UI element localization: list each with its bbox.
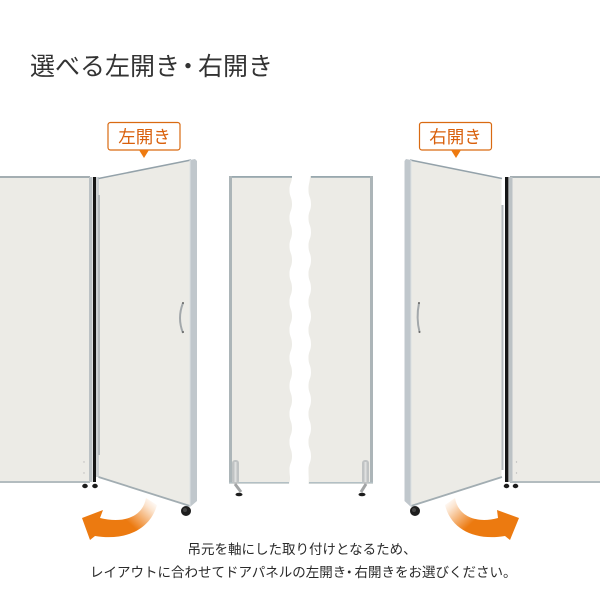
label: left-hinged (108, 122, 180, 158)
title: 選べる左開き (30, 53, 180, 81)
label: left-hinged: 左開き (118, 127, 171, 147)
left-hinged door (98, 159, 197, 516)
caption: 吊元を軸にした取り付けとなるため、 (188, 542, 417, 557)
center sample: left-side edge (229, 176, 292, 496)
caption: 右開きをお選びください。 (354, 565, 516, 580)
center sample: right-side edge (308, 176, 373, 496)
title: ・ (176, 53, 201, 81)
caption: ・ (342, 565, 356, 580)
label: right-hinged: 右開き (429, 127, 482, 147)
right-hinged door (404, 159, 502, 516)
arrow: swing left (82, 498, 157, 540)
right fixed panel (501, 176, 600, 488)
caption (90, 542, 516, 580)
caption: レイアウトに合わせてドアパネルの左開き (90, 565, 346, 580)
label: right-hinged (420, 122, 492, 158)
icon: caster (410, 506, 420, 516)
icon: stabilizer foot (232, 460, 242, 496)
icon: door handle (180, 302, 184, 333)
icon: caster (181, 506, 191, 516)
icon: stabilizer foot (358, 460, 369, 496)
arrow: swing right (445, 498, 519, 540)
icon: door handle (418, 302, 420, 333)
left fixed panel (0, 176, 99, 488)
title: 右開き (198, 53, 273, 81)
